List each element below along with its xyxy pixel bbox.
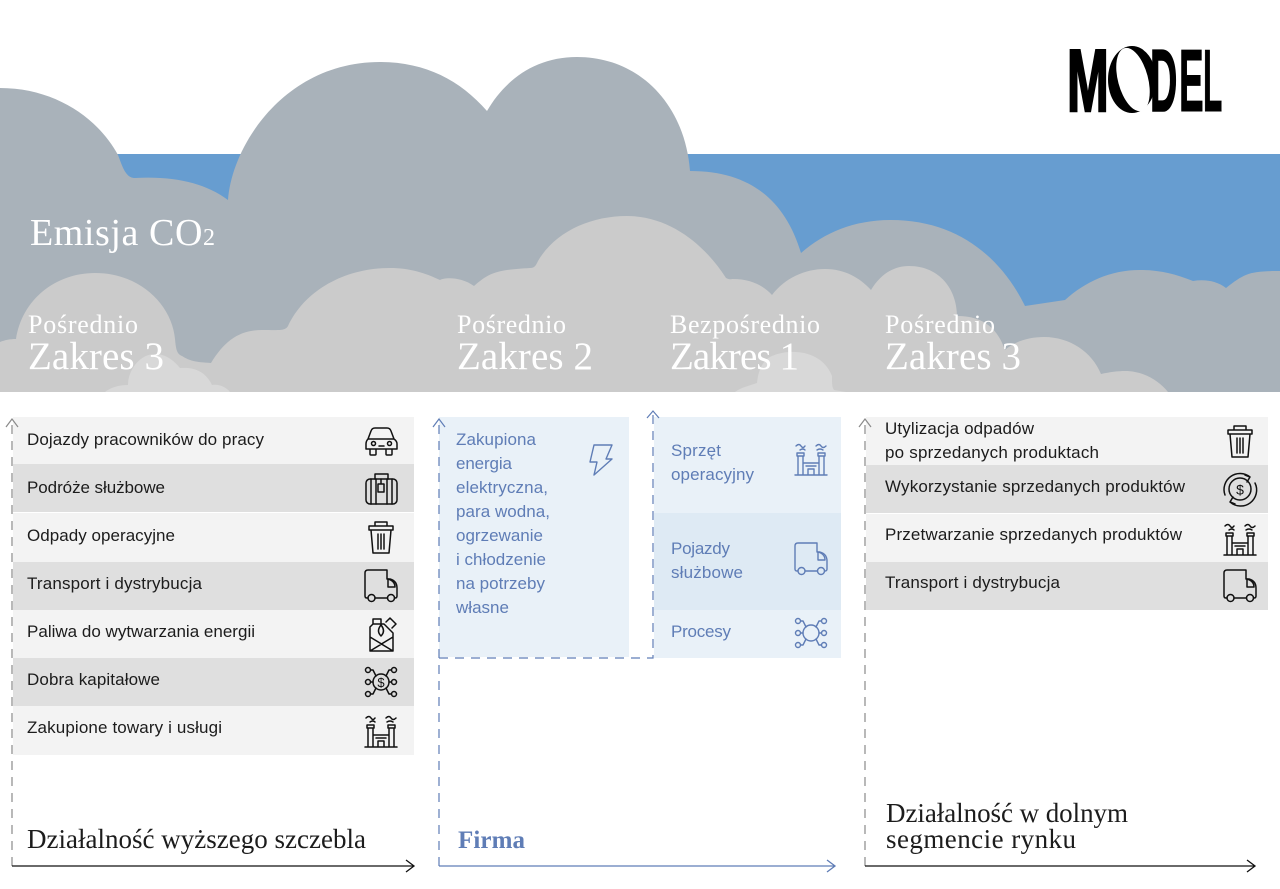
icon: factory [795,444,827,475]
icon: truck [365,570,397,602]
panel: purchased energy: elektryczna, [456,478,548,497]
panel: purchased energy: para wodna, [456,502,550,521]
heading: downstream scope: Pośrednio [885,310,995,339]
icon: dollar network [366,668,396,696]
light cloud [0,216,1168,392]
label: downstream [886,798,1128,854]
heading: downstream scope: Zakres 3 [885,335,1021,378]
panel: direct activities: Sprzęt [671,441,721,460]
logo: E [1179,33,1204,131]
sky band [0,154,1280,324]
heading: scope 1 [670,310,820,378]
panel: upstream activities [13,417,414,755]
arrow: company solid [439,860,835,872]
panel: downstream activities: po sprzedanych produktach [885,443,1099,462]
arrow: company dashed [433,411,659,866]
icon: circular dollar: $ [1236,482,1244,498]
heading: scope 2: Zakres 2 [457,335,593,378]
panel: direct activities: Pojazdy [671,539,730,558]
panel: upstream activities: Dobra kapitałowe [27,670,160,689]
heading: scope 1: Zakres 1 [670,335,799,378]
heading: upstream scope [28,310,164,378]
panel: direct activities: Procesy [671,622,732,641]
heading: downstream scope [885,310,1021,378]
heading: scope 2 [457,310,593,378]
panel: purchased energy: na potrzeby [456,574,546,593]
label: upstream: Działalność wyższego szczebla [27,824,366,854]
panel: purchased energy: energia [456,454,513,473]
icon: fuel canister [370,618,396,651]
panel: downstream activities [866,417,1268,610]
panel: downstream activities: Wykorzystanie sprzedanych produktów [885,477,1186,496]
icon: trash [1228,426,1252,457]
panel: purchased energy [439,417,629,657]
arrow: upstream solid [12,860,414,872]
logo [1067,32,1222,131]
heading: scope 1: Bezpośrednio [670,310,820,339]
arrow: downstream dashed [859,419,871,866]
heading: scope 2: Pośrednio [457,310,566,339]
panel: upstream activities: Transport i dystrybucja [27,574,203,593]
panel: purchased energy: własne [455,598,509,617]
panel: direct activities [654,417,841,658]
panel: purchased energy: Zakupiona [456,430,537,449]
icon: car [366,428,397,455]
panel: upstream activities: Paliwa do wytwarzania energii [27,622,255,641]
heading: upstream scope: Pośrednio [28,310,138,339]
panel: upstream activities: Odpady operacyjne [27,526,175,545]
icon: factory [365,716,397,747]
icon: lightning bolt [590,445,612,475]
title: Emisja CO2 [30,212,215,254]
lighter cloud left [105,354,230,392]
label: downstream: segmencie rynku [886,824,1076,854]
panel: downstream activities: Przetwarzanie sprzedanych produktów [885,525,1183,544]
arrow: upstream dashed [6,419,18,866]
icon: circular dollar [1224,474,1257,506]
panel: downstream activities: Utylizacja odpadów [885,419,1035,438]
icon: dollar network: $ [377,675,385,690]
panel: downstream activities: Transport i dystrybucja [885,573,1061,592]
lighter cloud centre [735,352,846,392]
icon: suitcase [366,474,397,504]
panel: upstream activities: Podróże służbowe [27,478,165,497]
logo: M [1067,32,1109,131]
icon: trash [369,522,393,553]
arrow: downstream solid [865,860,1255,872]
logo: D [1150,33,1177,130]
dark cloud [0,57,1280,392]
panel: upstream activities: Zakupione towary i usługi [27,718,222,737]
panel: upstream activities: Dojazdy pracowników do pracy [27,430,264,449]
logo: L [1203,32,1222,131]
icon: process network [796,618,826,648]
label: company: Firma [458,827,526,854]
icon: factory [1224,524,1256,555]
panel: purchased energy: ogrzewanie [456,526,543,545]
icon: truck [1224,570,1256,602]
label: downstream: Działalność w dolnym [886,798,1128,828]
panel: direct activities: służbowe [671,563,743,582]
icon: truck [795,543,827,574]
panel: purchased energy: i chłodzenie [456,550,546,569]
heading: upstream scope: Zakres 3 [28,335,164,378]
panel: direct activities: operacyjny [671,465,754,484]
